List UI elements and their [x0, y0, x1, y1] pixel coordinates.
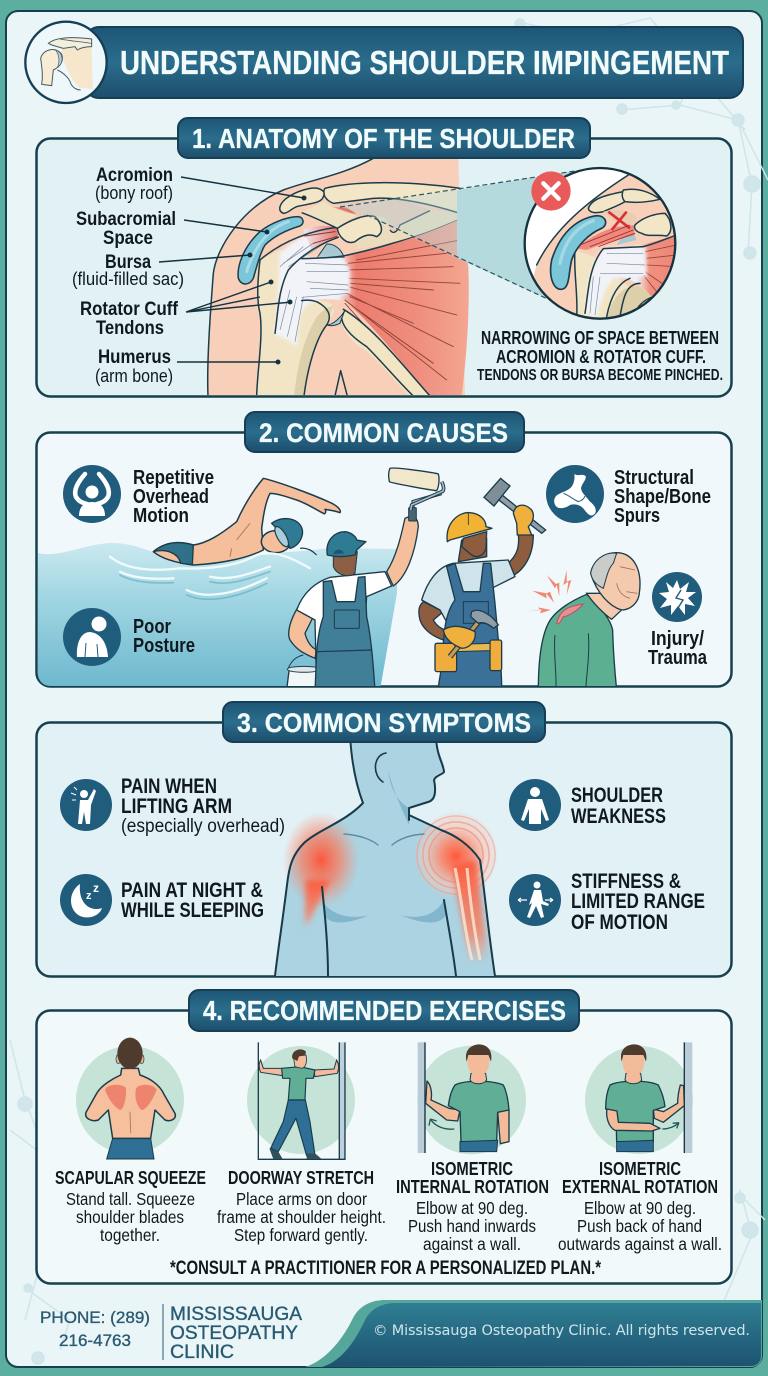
anatomy labels: Rotator Cuff	[80, 299, 179, 320]
exercise text: internal rotation: INTERNAL ROTATION	[396, 1177, 549, 1197]
disclaimer: *CONSULT A PRACTITIONER FOR A PERSONALIZED PLAN.*	[170, 1258, 601, 1279]
icon: night pain: z	[86, 890, 92, 902]
illustration: water	[38, 468, 640, 690]
heading: section 1	[178, 118, 590, 158]
clinic name: MISSISSAUGA	[170, 1304, 302, 1325]
exercise text: scapular squeeze: Stand tall. Squeeze	[66, 1189, 195, 1209]
exercise text: doorway stretch: DOORWAY STRETCH	[228, 1168, 374, 1188]
illustration: swimmer	[110, 478, 340, 599]
heading: section 1: 1. ANATOMY OF THE SHOULDER	[192, 123, 575, 154]
icon: poor posture	[63, 608, 121, 666]
cause labels: Motion	[133, 505, 189, 527]
exercise text: external rotation: Push back of hand	[577, 1216, 702, 1236]
exercise: doorway stretch figure	[247, 1042, 355, 1159]
clinic name: CLINIC	[170, 1342, 234, 1363]
exercise text: doorway stretch: frame at shoulder height.	[217, 1207, 386, 1227]
exercise text: external rotation	[558, 1159, 722, 1254]
exercise text: internal rotation: Elbow at 90 deg.	[416, 1198, 528, 1218]
symptom labels	[121, 775, 705, 934]
symptom labels: PAIN AT NIGHT &	[121, 879, 263, 902]
panel: recommended exercises	[36, 1010, 732, 1284]
anatomy labels: Acromion	[96, 165, 173, 186]
symptom labels: LIMITED RANGE	[571, 890, 705, 913]
anatomy labels: Bursa	[105, 252, 151, 273]
exercise text: doorway stretch: Step forward gently.	[234, 1225, 368, 1245]
symptom labels: WHILE SLEEPING	[121, 899, 264, 922]
bursa	[238, 217, 303, 284]
anatomy labels: (bony roof)	[95, 183, 173, 203]
illustration: elderly man	[526, 553, 640, 690]
heading: section 2: 2. COMMON CAUSES	[259, 418, 508, 448]
symptom labels: WEAKNESS	[571, 805, 666, 828]
anatomy labels: Humerus	[98, 347, 171, 368]
exercise text: internal rotation: Push hand inwards	[408, 1216, 536, 1236]
exercise: scapular squeeze figure	[76, 1038, 184, 1159]
exercise text: doorway stretch	[217, 1168, 386, 1245]
icon: structural bone	[546, 465, 604, 523]
symptom labels: STIFFNESS &	[571, 870, 681, 893]
clinic name	[170, 1304, 302, 1363]
heading: section 4	[189, 990, 579, 1031]
exercise text: external rotation: outwards against a wall.	[558, 1234, 722, 1254]
symptom labels: OF MOTION	[571, 911, 668, 934]
anatomy labels: Space	[103, 228, 153, 249]
anatomy illustration	[208, 158, 469, 396]
exercise text: external rotation: ISOMETRIC	[599, 1159, 681, 1179]
icon: red X badge	[531, 171, 571, 211]
cause labels: Trauma	[648, 647, 708, 669]
illustration: painter	[287, 493, 442, 690]
symptom labels: (especially overhead)	[121, 816, 285, 837]
exercise text: scapular squeeze: shoulder blades	[76, 1207, 184, 1227]
illustration: construction worker	[419, 478, 546, 687]
heading: section 2	[245, 412, 524, 452]
cause labels: Spurs	[614, 505, 660, 527]
exercise: external rotation figure	[585, 1042, 693, 1154]
panel: common causes	[36, 432, 732, 690]
cause labels: Repetitive	[133, 467, 214, 489]
icon: night pain: z	[93, 881, 99, 895]
exercise text: external rotation: EXTERNAL ROTATION	[562, 1177, 718, 1197]
anatomy labels: Tendons	[96, 318, 164, 339]
contact phone: PHONE: (289)	[40, 1308, 150, 1327]
callout cone	[340, 171, 575, 301]
anatomy labels	[72, 165, 184, 386]
heading: section 3: 3. COMMON SYMPTOMS	[237, 708, 531, 738]
exercise text: internal rotation: against a wall.	[423, 1234, 521, 1254]
icon: repetitive overhead motion	[63, 465, 121, 523]
contact phone	[40, 1308, 150, 1350]
exercise text: scapular squeeze: SCAPULAR SQUEEZE	[55, 1168, 206, 1188]
exercise text: scapular squeeze: together.	[100, 1225, 160, 1245]
title banner	[85, 27, 743, 98]
exercise text: internal rotation: ISOMETRIC	[431, 1159, 513, 1179]
impingement explanation	[477, 328, 723, 384]
heading: section 4: 4. RECOMMENDED EXERCISES	[203, 995, 566, 1026]
magnified impingement circle	[524, 166, 676, 320]
icon: shoulder weakness	[509, 779, 561, 831]
icon: injury burst	[652, 572, 702, 622]
exercise: internal rotation figure	[417, 1042, 526, 1154]
cause labels: Posture	[133, 635, 195, 657]
symptom labels: PAIN WHEN	[121, 775, 217, 798]
copyright: © Mississauga Osteopathy Clinic. All rights reserved.	[373, 1323, 750, 1339]
icon: pain lifting arm	[60, 779, 112, 831]
clinic name: OSTEOPATHY	[170, 1323, 298, 1344]
panel: common symptoms	[36, 722, 732, 976]
footer band	[305, 1300, 762, 1367]
symptom labels: LIFTING ARM	[121, 795, 232, 818]
impingement explanation: ACROMION & ROTATOR CUFF.	[496, 347, 706, 367]
contact phone: 216-4763	[59, 1331, 131, 1350]
anatomy labels: (fluid-filled sac)	[72, 269, 184, 289]
exercise text: scapular squeeze	[55, 1168, 206, 1245]
cause labels: Structural	[614, 467, 694, 489]
cause labels	[133, 467, 711, 669]
exercise text: doorway stretch: Place arms on door	[236, 1189, 367, 1209]
icon: night pain	[60, 874, 112, 926]
cause labels: Shape/Bone	[614, 486, 711, 508]
cause labels: Overhead	[133, 486, 209, 508]
icon: stiffness	[509, 874, 561, 926]
anatomy labels: Subacromial	[76, 209, 176, 230]
illustration: torso with shoulder pain	[275, 735, 498, 976]
icon: shoulder joint logo	[25, 22, 107, 103]
cause labels: Poor	[133, 616, 171, 638]
panel: anatomy of the shoulder	[36, 138, 732, 396]
anatomy labels: (arm bone)	[95, 366, 173, 386]
exercise text: internal rotation	[396, 1159, 549, 1254]
cause labels: Injury/	[651, 628, 704, 650]
leader lines	[159, 177, 306, 364]
bones: acromion and clavicle	[335, 199, 396, 232]
exercise text: external rotation: Elbow at 90 deg.	[584, 1198, 696, 1218]
symptom labels: SHOULDER	[571, 784, 663, 807]
